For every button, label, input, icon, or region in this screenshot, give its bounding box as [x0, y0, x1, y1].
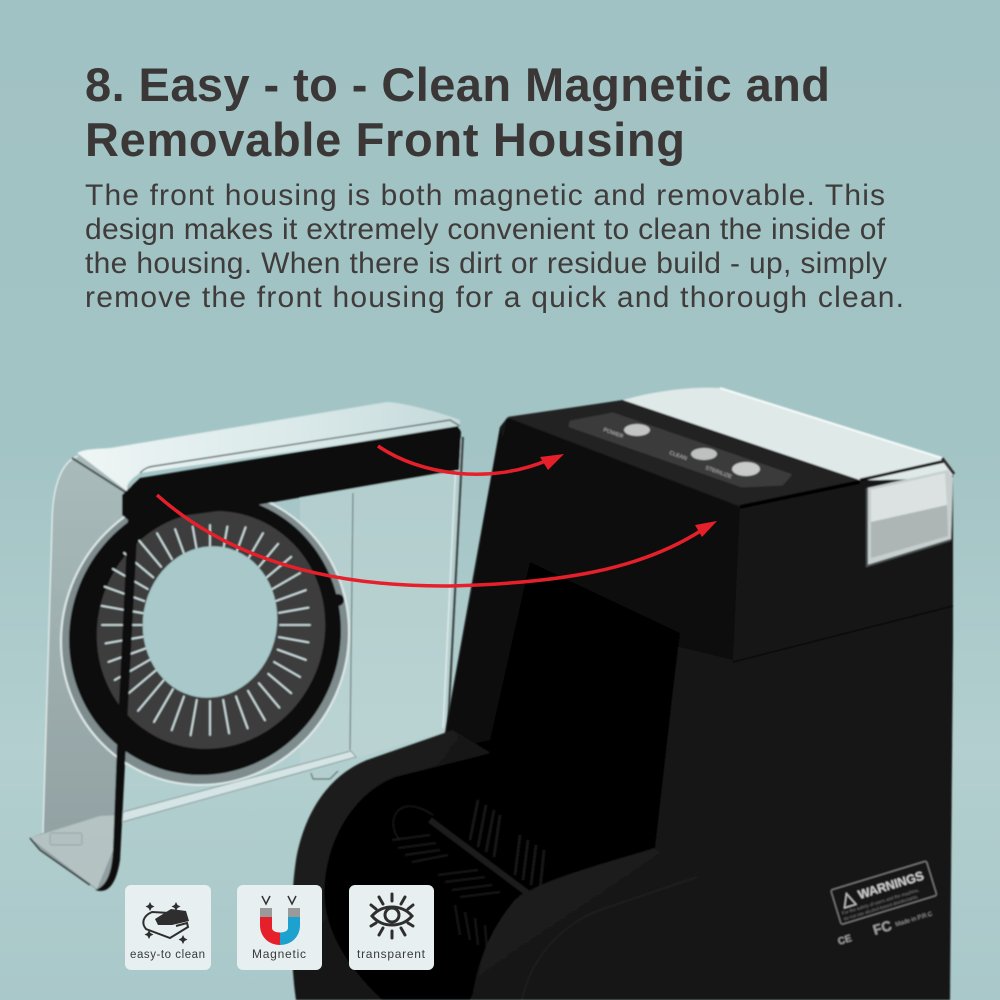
icon: eye: [371, 894, 413, 938]
arrow: lower: [157, 495, 717, 586]
button labels: CLEAN: [668, 450, 688, 462]
transparent right panel: [300, 437, 465, 770]
filter ring: [14, 443, 396, 831]
card: magnetic: [237, 885, 322, 970]
warning small print: For the safety of users and the machine,: [841, 887, 920, 916]
brush roller: [392, 800, 544, 950]
title: 8. Easy - to - Clean Magnetic and: [85, 58, 830, 111]
button labels: STERILIZE: [704, 465, 733, 481]
title: Removable Front Housing: [85, 113, 685, 166]
label border: [831, 861, 937, 925]
black top bar: [122, 426, 461, 524]
left wall: [447, 427, 530, 753]
warnings heading: WARNINGS: [856, 869, 926, 902]
description text: [85, 179, 904, 314]
grey vented disc: [59, 474, 363, 786]
transparent top lid: [623, 388, 953, 480]
clean button: [691, 448, 717, 460]
radial slits: [102, 525, 310, 735]
icon: magnet: [260, 896, 300, 945]
button labels: [602, 427, 733, 481]
front guard: [472, 848, 697, 1000]
warning triangle: [841, 892, 856, 908]
ring clips: [332, 594, 344, 606]
certification marks: [836, 904, 935, 949]
panel plate: [570, 414, 790, 486]
power button: [624, 424, 650, 436]
bottom glass strip: [122, 751, 356, 822]
front edge shading: [740, 482, 860, 507]
description text: the housing. When there is dirt or residue build - up, simply: [85, 247, 887, 280]
red arrows: [157, 446, 717, 586]
glass top cover: [77, 402, 460, 492]
title: [85, 58, 830, 166]
label: transparent: [357, 947, 426, 961]
arrow: upper: [378, 446, 564, 474]
description text: remove the front housing for a quick and thorough clean.: [85, 281, 904, 314]
clear water tank: [867, 470, 953, 566]
machine body: [440, 400, 953, 1000]
button labels: POWER: [602, 427, 624, 440]
main machine: [292, 388, 954, 1000]
certification marks: Made in P.R.C: [895, 911, 934, 928]
certification marks: FC: [871, 917, 893, 938]
removable front housing: [14, 402, 465, 891]
description text: The front housing is both magnetic and removable. This: [85, 179, 885, 212]
top front face: [478, 418, 740, 660]
black front edge of side panel: [95, 518, 138, 891]
top surface: [507, 400, 860, 506]
centre opening: [131, 536, 289, 708]
control panel: [570, 414, 790, 486]
body seam: [733, 606, 953, 662]
warnings label: [831, 861, 937, 925]
sterilize button: [732, 462, 760, 476]
card: transparent: [349, 885, 434, 970]
dark recess: [308, 562, 680, 1000]
label: Magnetic: [252, 947, 306, 961]
left guard: [292, 730, 490, 1000]
certification marks: CE: [837, 933, 853, 948]
card: easy-to clean: [125, 885, 211, 970]
black ring body: [24, 451, 386, 819]
left side panel: [30, 456, 135, 891]
outer clear ring: [14, 443, 396, 831]
label: easy-to clean: [130, 949, 205, 961]
description text: design makes it extremely convenient to clean the inside of: [85, 213, 886, 246]
icon: hand wash: [143, 902, 189, 944]
warning small print: do not use alcohol-based disinfectants.: [843, 894, 919, 921]
